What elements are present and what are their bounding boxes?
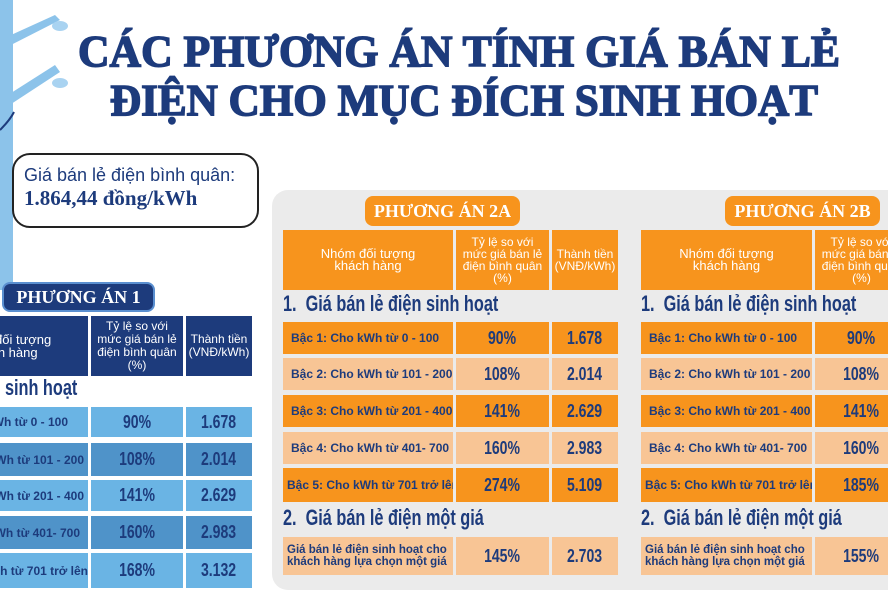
- panel: phuong an 1: 160%: [119, 522, 155, 542]
- panel: phuong an 1: [0, 282, 252, 588]
- panel: phuong an 1: (%): [128, 358, 146, 372]
- table: phuong an 2A: 1. Giá bán lẻ điện sinh hoạt: [283, 291, 498, 316]
- table: phuong an 2A: điện bình quân: [463, 259, 542, 273]
- panel: phuong an 1: mức giá bán lẻ: [97, 332, 177, 346]
- panel: phuong an 1: điện bình quân: [97, 345, 177, 359]
- table: phuong an 2A: 2. Giá bán lẻ điện một giá: [283, 505, 484, 530]
- table: phuong an 2A: 160%: [485, 438, 520, 458]
- table: phuong an 2A: Bậc 1: Cho kWh từ 0 - 100: [291, 331, 439, 345]
- table: phuong an 2B: Bậc 4: Cho kWh từ 401- 700: [649, 441, 807, 455]
- panel: phuong an 2 (gray): [272, 190, 888, 590]
- table: phuong an 2A: Nhóm đối tượng: [321, 246, 415, 261]
- title: [78, 27, 840, 125]
- table: phuong an 2B: 185%: [844, 474, 879, 494]
- table: phuong an 2B: 160%: [844, 438, 879, 458]
- table: phuong an 2A: Tỷ lệ so với: [472, 235, 533, 249]
- table: phuong an 2A: 5.109: [567, 474, 603, 494]
- panel: phuong an 1: Tỷ lệ so với: [106, 319, 168, 333]
- panel: phuong an 1: (VNĐ/kWh): [189, 345, 249, 359]
- table: phuong an 2A: Bậc 4: Cho kWh từ 401- 700: [291, 441, 449, 455]
- panel: phuong an 1: 1.678: [201, 412, 237, 432]
- panel: phuong an 1: 108%: [119, 449, 155, 469]
- table: phuong an 2B: Nhóm đối tượng: [679, 246, 774, 261]
- table: phuong an 2A: 1.678: [567, 328, 603, 348]
- table: phuong an 2B: 1. Giá bán lẻ điện sinh hoạt: [641, 291, 856, 316]
- panel: phuong an 1: 2.014: [201, 449, 237, 469]
- table: phuong an 2A: (%): [493, 271, 512, 285]
- panel: phuong an 1: 90%: [123, 412, 151, 432]
- panel: phuong an 1: 3.132: [201, 560, 237, 580]
- callout: average price: Giá bán lẻ điện bình quân:: [24, 165, 235, 185]
- table: phuong an 2B: 90%: [847, 328, 876, 348]
- badge: phuong an 2A: PHƯƠNG ÁN 2A: [374, 200, 511, 220]
- table: phuong an 2A: (VNĐ/kWh): [555, 259, 615, 273]
- callout: average price: 1.864,44 đồng/kWh: [24, 186, 197, 210]
- table: phuong an 2A: 90%: [488, 328, 517, 348]
- panel: phuong an 1: 2.629: [201, 485, 237, 505]
- panel: phuong an 1: 168%: [119, 560, 155, 580]
- table: phuong an 2B: 141%: [844, 400, 879, 420]
- table: phuong an 2A: Giá bán lẻ điện sinh hoạt cho: [287, 544, 447, 556]
- table: phuong an 2B: Bậc 1: Cho kWh từ 0 - 100: [649, 331, 797, 345]
- badge: phuong an 2B: [725, 196, 880, 226]
- table: phuong an 2A: mức giá bán lẻ: [463, 247, 542, 261]
- table: phuong an 2B: 155%: [844, 546, 879, 566]
- table: phuong an 2B: Bậc 3: Cho kWh từ 201 - 400: [649, 404, 810, 418]
- table: phuong an 2A: Bậc 2: Cho kWh từ 101 - 200: [291, 367, 452, 381]
- panel: phuong an 1: 141%: [119, 485, 155, 505]
- badge: phuong an 1: PHƯƠNG ÁN 1: [16, 286, 141, 306]
- table: phuong an 2B: Bậc 2: Cho kWh từ 101 - 200: [649, 367, 810, 381]
- table: phuong an 2A: 141%: [485, 400, 520, 420]
- badge: phuong an 2B: PHƯƠNG ÁN 2B: [734, 200, 871, 220]
- table: phuong an 2B: Bậc 5: Cho kWh từ 701 trở lên: [645, 478, 812, 492]
- table: phuong an 2A: 2.703: [567, 546, 603, 566]
- table: phuong an 2A: 2.629: [567, 400, 603, 420]
- title: CÁC PHƯƠNG ÁN TÍNH GIÁ BÁN LẺ: [78, 27, 840, 76]
- table: phuong an 2A: 274%: [485, 474, 520, 494]
- table: phuong an 2B: 2. Giá bán lẻ điện một giá: [641, 505, 842, 530]
- table: phuong an 2B: (%): [852, 271, 871, 285]
- table: phuong an 2A: khách hàng lựa chọn một giá: [287, 556, 447, 568]
- title: ĐIỆN CHO MỤC ĐÍCH SINH HOẠT: [110, 76, 818, 125]
- table: phuong an 2A: Bậc 3: Cho kWh từ 201 - 400: [291, 404, 452, 418]
- panel: phuong an 1: 2.983: [201, 522, 237, 542]
- table: phuong an 2A: 145%: [485, 546, 520, 566]
- callout: average price: [12, 153, 259, 228]
- table: phuong an 2B: Giá bán lẻ điện sinh hoạt cho: [645, 544, 805, 556]
- icon: power pole: [0, 0, 68, 290]
- badge: phuong an 1: [2, 282, 155, 312]
- panel: phuong an 1: Thành tiền: [191, 332, 247, 346]
- table: phuong an 2B: khách hàng lựa chọn một giá: [645, 556, 805, 568]
- table: phuong an 2A: 108%: [485, 364, 520, 384]
- table: phuong an 2A: [283, 230, 618, 575]
- badge: phuong an 2A: [365, 196, 520, 226]
- table: phuong an 2B: [641, 230, 888, 575]
- table: phuong an 2A: 2.983: [567, 438, 603, 458]
- table: phuong an 2A: 2.014: [567, 364, 603, 384]
- table: phuong an 2B: 108%: [844, 364, 879, 384]
- table: phuong an 2A: Thành tiền: [557, 247, 613, 261]
- table: phuong an 2B: khách hàng: [693, 258, 760, 273]
- table: phuong an 2A: khách hàng: [334, 258, 402, 273]
